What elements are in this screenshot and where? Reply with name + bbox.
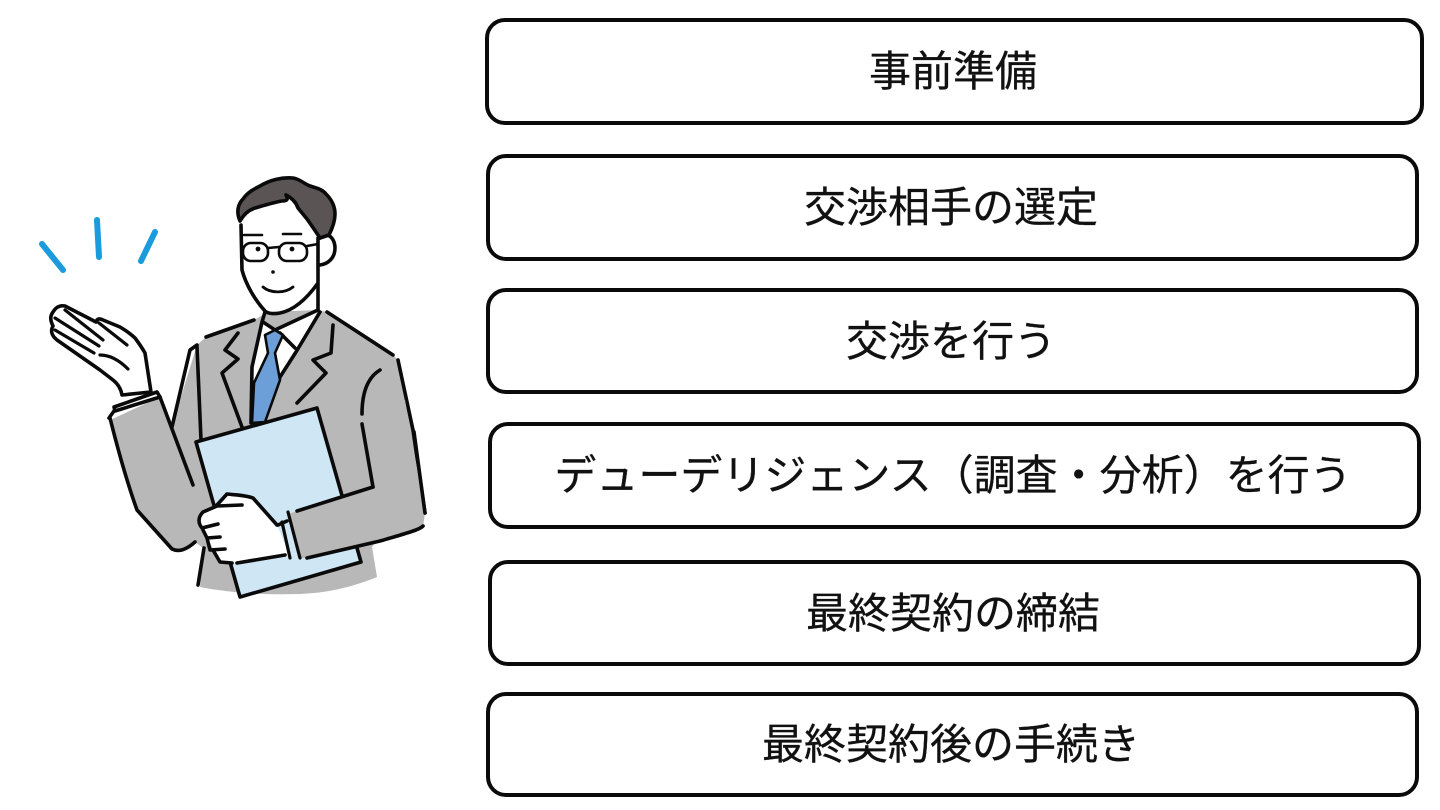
step 2: 交渉相手の選定: 交渉相手の選定 bbox=[804, 184, 1098, 231]
face details: glasses, eyes, brows, nose, smile bbox=[243, 234, 318, 292]
step 6: 最終契約後の手続き bbox=[486, 692, 1419, 797]
shirt and collar bbox=[251, 310, 320, 423]
step 5: 最終契約の締結: 最終契約の締結 bbox=[806, 590, 1100, 636]
step 4: デューデリジェンス（調査・分析）を行う bbox=[488, 422, 1421, 529]
head: face, ear, hair bbox=[238, 178, 335, 314]
raised left hand bbox=[51, 306, 151, 395]
document folder bbox=[196, 408, 361, 597]
necktie bbox=[252, 330, 283, 423]
illustration: businessman presenting with folder bbox=[39, 176, 427, 599]
step 1: 事前準備: 事前準備 bbox=[869, 48, 1037, 95]
step 5: 最終契約の締結 bbox=[488, 560, 1421, 666]
left sleeve and cuff bbox=[109, 392, 215, 551]
step 1: 事前準備 bbox=[485, 18, 1424, 125]
icon: blue emphasis ticks bbox=[42, 220, 155, 270]
hand holding folder bbox=[198, 494, 300, 563]
right arm sleeve bbox=[288, 400, 425, 558]
suit body bbox=[170, 310, 425, 594]
lapels bbox=[222, 325, 380, 427]
step 3: 交渉を行う bbox=[486, 288, 1419, 394]
step 2: 交渉相手の選定 bbox=[486, 154, 1419, 261]
step 3: 交渉を行う: 交渉を行う bbox=[846, 318, 1056, 364]
step 6: 最終契約後の手続き: 最終契約後の手続き bbox=[762, 721, 1140, 768]
step 4: デューデリジェンス（調査・分析）を行う: デューデリジェンス（調査・分析）を行う bbox=[554, 452, 1352, 499]
